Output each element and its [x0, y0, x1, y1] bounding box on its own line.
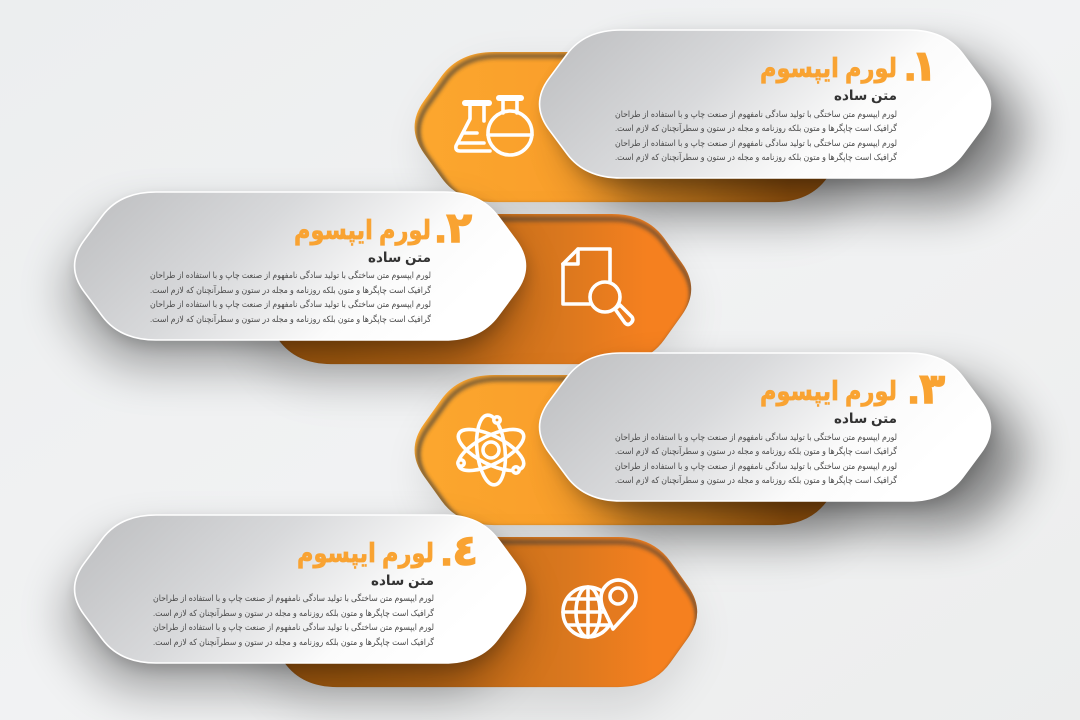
icon: document search: [563, 249, 633, 324]
step 4 body text: گرافیک است چاپگرها و متون بلکه روزنامه و مجله در ستون و سطرآنچنان که لازم است.: [153, 636, 435, 647]
step 1 title: لورم ایپسوم: [760, 53, 897, 84]
step 1 body text: گرافیک است چاپگرها و متون بلکه روزنامه و مجله در ستون و سطرآنچنان که لازم است.: [615, 122, 898, 133]
step 3 body text: لورم ایپسوم متن ساختگی با تولید سادگی نامفهوم از صنعت چاپ و با استفاده از طراحان: [615, 461, 897, 471]
step 3 body text: گرافیک است چاپگرها و متون بلکه روزنامه و مجله در ستون و سطرآنچنان که لازم است.: [615, 445, 898, 456]
step 4 orange panel: [252, 537, 697, 707]
step 3 white card: [540, 353, 1024, 529]
step 1 body text: [615, 109, 898, 162]
step 2 title: لورم ایپسوم: [294, 215, 431, 246]
step 3 orange panel: [415, 375, 868, 547]
step 4 white card: [67, 515, 528, 689]
step 3 number: ۳.: [908, 365, 945, 412]
step 1 subtitle: متن ساده: [834, 88, 897, 103]
step 1: [415, 30, 1024, 224]
step 4: [67, 515, 697, 707]
step 3 subtitle: متن ساده: [834, 411, 897, 426]
step 4 body text: گرافیک است چاپگرها و متون بلکه روزنامه و مجله در ستون و سطرآنچنان که لازم است.: [153, 607, 435, 618]
step 2 orange panel: [246, 214, 691, 384]
step 1 orange panel: [415, 52, 868, 224]
step 2 number: ۲.: [435, 204, 472, 251]
step 1 body text: لورم ایپسوم متن ساختگی با تولید سادگی نامفهوم از صنعت چاپ و با استفاده از طراحان: [615, 138, 897, 148]
step 2 body text: گرافیک است چاپگرها و متون بلکه روزنامه و مجله در ستون و سطرآنچنان که لازم است.: [150, 284, 432, 295]
step 3 body text: [615, 432, 898, 485]
step 4 number: ٤.: [441, 527, 478, 574]
step 2 body text: لورم ایپسوم متن ساختگی با تولید سادگی نامفهوم از صنعت چاپ و با استفاده از طراحان: [150, 299, 431, 309]
step 1 body text: لورم ایپسوم متن ساختگی با تولید سادگی نامفهوم از صنعت چاپ و با استفاده از طراحان: [615, 109, 897, 119]
step 1 body text: گرافیک است چاپگرها و متون بلکه روزنامه و مجله در ستون و سطرآنچنان که لازم است.: [615, 151, 898, 162]
icon: flasks: [456, 98, 532, 155]
step 2 body text: گرافیک است چاپگرها و متون بلکه روزنامه و مجله در ستون و سطرآنچنان که لازم است.: [150, 313, 432, 324]
step 3: [415, 353, 1024, 547]
step 4 body text: [153, 593, 435, 647]
step 2 body text: [150, 270, 432, 324]
step 4 title: لورم ایپسوم: [297, 538, 434, 569]
step 2 body text: لورم ایپسوم متن ساختگی با تولید سادگی نامفهوم از صنعت چاپ و با استفاده از طراحان: [150, 270, 431, 280]
step 4 subtitle: متن ساده: [371, 573, 434, 588]
step 4 body text: لورم ایپسوم متن ساختگی با تولید سادگی نامفهوم از صنعت چاپ و با استفاده از طراحان: [153, 622, 434, 632]
step 3 title: لورم ایپسوم: [760, 376, 897, 407]
step 1 white card: [540, 30, 1024, 206]
icon: globe with pin: [563, 580, 636, 637]
step 4 body text: لورم ایپسوم متن ساختگی با تولید سادگی نامفهوم از صنعت چاپ و با استفاده از طراحان: [153, 593, 434, 603]
step 2 white card: [67, 192, 528, 366]
step 1 number: ۱: [911, 42, 937, 89]
step 2 subtitle: متن ساده: [368, 250, 431, 265]
icon: atom: [453, 414, 529, 486]
step 2: [67, 192, 691, 384]
step 1 number: .: [904, 42, 916, 89]
step 3 body text: لورم ایپسوم متن ساختگی با تولید سادگی نامفهوم از صنعت چاپ و با استفاده از طراحان: [615, 432, 897, 442]
step 3 body text: گرافیک است چاپگرها و متون بلکه روزنامه و مجله در ستون و سطرآنچنان که لازم است.: [615, 474, 898, 485]
